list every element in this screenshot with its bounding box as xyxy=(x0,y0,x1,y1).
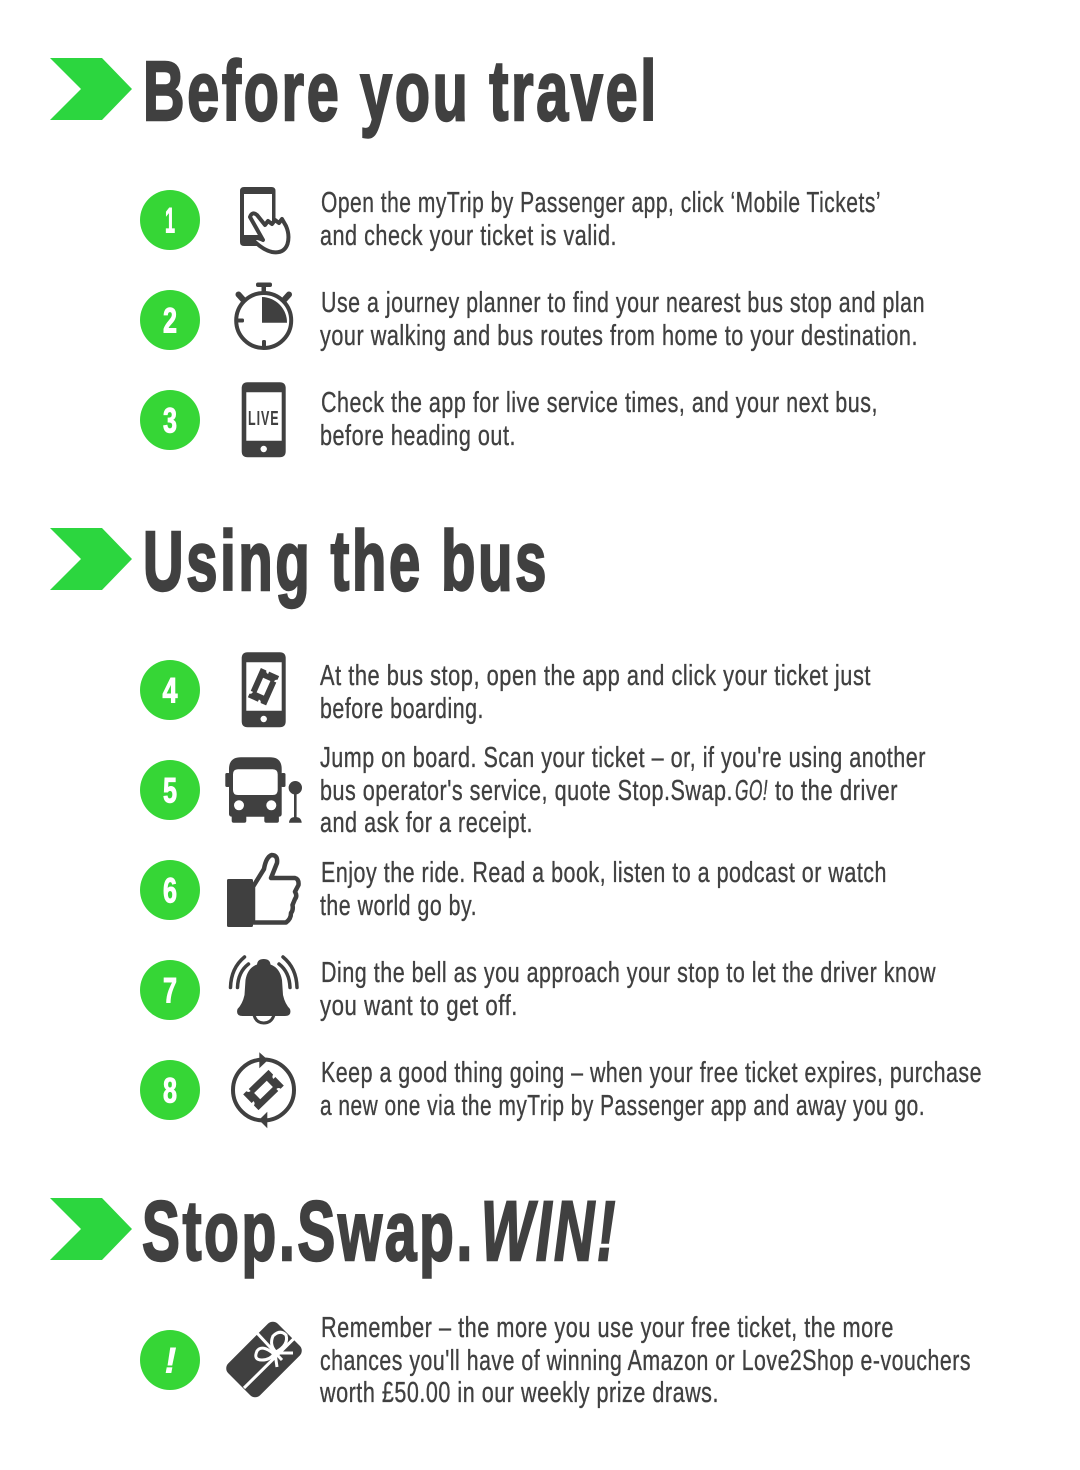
heading: Before you travel: Before you travel xyxy=(143,44,659,138)
text: step 5: bus operator's service, quote Stop.Swap. xyxy=(320,775,733,807)
number badge 7: 7 xyxy=(163,972,177,1010)
step 8 xyxy=(140,1052,982,1128)
arrow: heading chevron xyxy=(50,1198,132,1260)
text: step 6: the world go by. xyxy=(320,890,477,922)
step 6 xyxy=(140,855,887,927)
arrow: heading chevron xyxy=(50,528,132,590)
section: Stop.Swap.WIN! heading xyxy=(50,1184,618,1278)
number badge 1 xyxy=(140,190,200,250)
text: step 7 xyxy=(320,957,936,1022)
number badge 3: 3 xyxy=(163,402,177,440)
exclamation badge: ! xyxy=(165,1342,176,1380)
text: step 1 xyxy=(320,187,881,252)
step 2 xyxy=(140,282,925,352)
number badge 5 xyxy=(140,760,200,820)
text: step 4 xyxy=(320,660,871,725)
icon: bus and bus stop xyxy=(225,757,302,823)
number badge 1: 1 xyxy=(165,202,175,240)
step 3 xyxy=(140,382,878,457)
step 5 xyxy=(140,742,926,839)
step 1 xyxy=(140,187,881,252)
text: step 4: At the bus stop, open the app and click your ticket just xyxy=(320,660,871,692)
text: step 1: Open the myTrip by Passenger app, click ‘Mobile Tickets’ xyxy=(321,187,881,219)
icon: renewing ticket xyxy=(233,1052,294,1128)
number badge 4: 4 xyxy=(162,672,178,710)
icon: thumbs up xyxy=(227,855,299,927)
text: step 5 xyxy=(320,742,926,839)
number badge 8: 8 xyxy=(163,1072,177,1110)
text: step 6 xyxy=(320,857,887,922)
number badge 2: 2 xyxy=(163,302,177,340)
icon: gift voucher xyxy=(223,1319,305,1400)
text: step 3: Check the app for live service times, and your next bus, xyxy=(321,387,878,419)
exclamation badge xyxy=(140,1330,200,1390)
heading: Stop.Swap.WIN!: WIN! xyxy=(481,1184,618,1278)
text: step 7: you want to get off. xyxy=(320,990,518,1022)
number badge 7 xyxy=(140,960,200,1020)
number badge 2 xyxy=(140,290,200,350)
text: step 5: and ask for a receipt. xyxy=(320,807,533,839)
text: step 8 xyxy=(320,1057,982,1122)
number badge 6 xyxy=(140,860,200,920)
icon: phone with ticket xyxy=(242,652,286,727)
number badge 4 xyxy=(140,660,200,720)
text: step 3: before heading out. xyxy=(320,420,516,452)
text: step 2 xyxy=(320,287,925,352)
icon: phone showing LIVE xyxy=(242,382,286,457)
number badge 6: 6 xyxy=(163,872,177,910)
text: prize reminder xyxy=(319,1312,971,1409)
icon: phone with tapping hand xyxy=(240,187,288,252)
text: step 1: and check your ticket is valid. xyxy=(320,220,617,252)
prize reminder xyxy=(140,1312,971,1409)
icon: ringing bell xyxy=(230,957,297,1023)
text: step 3 xyxy=(320,387,878,452)
section: Using the bus heading xyxy=(50,514,549,608)
heading: Using the bus: Using the bus xyxy=(143,514,549,608)
text: prize reminder: Remember – the more you use your free ticket, the more xyxy=(321,1312,894,1344)
number badge 5: 5 xyxy=(163,772,177,810)
number badge 8 xyxy=(140,1060,200,1120)
text: step 6: Enjoy the ride. Read a book, listen to a podcast or watch xyxy=(321,857,887,889)
text: step 4: before boarding. xyxy=(320,693,484,725)
step 4 xyxy=(140,652,871,727)
section: Before you travel heading xyxy=(50,44,659,138)
text: prize reminder: worth £50.00 in our weekly prize draws. xyxy=(319,1377,719,1409)
icon: phone showing LIVE: LIVE xyxy=(248,408,280,430)
heading: Stop.Swap.WIN!: Stop.Swap. xyxy=(142,1184,475,1278)
icon: stopwatch xyxy=(235,282,291,349)
text: step 5: to the driver xyxy=(775,775,898,807)
text: step 5: GO! xyxy=(735,775,768,807)
step 7 xyxy=(140,957,936,1023)
number badge 3 xyxy=(140,390,200,450)
arrow: heading chevron xyxy=(50,58,132,120)
